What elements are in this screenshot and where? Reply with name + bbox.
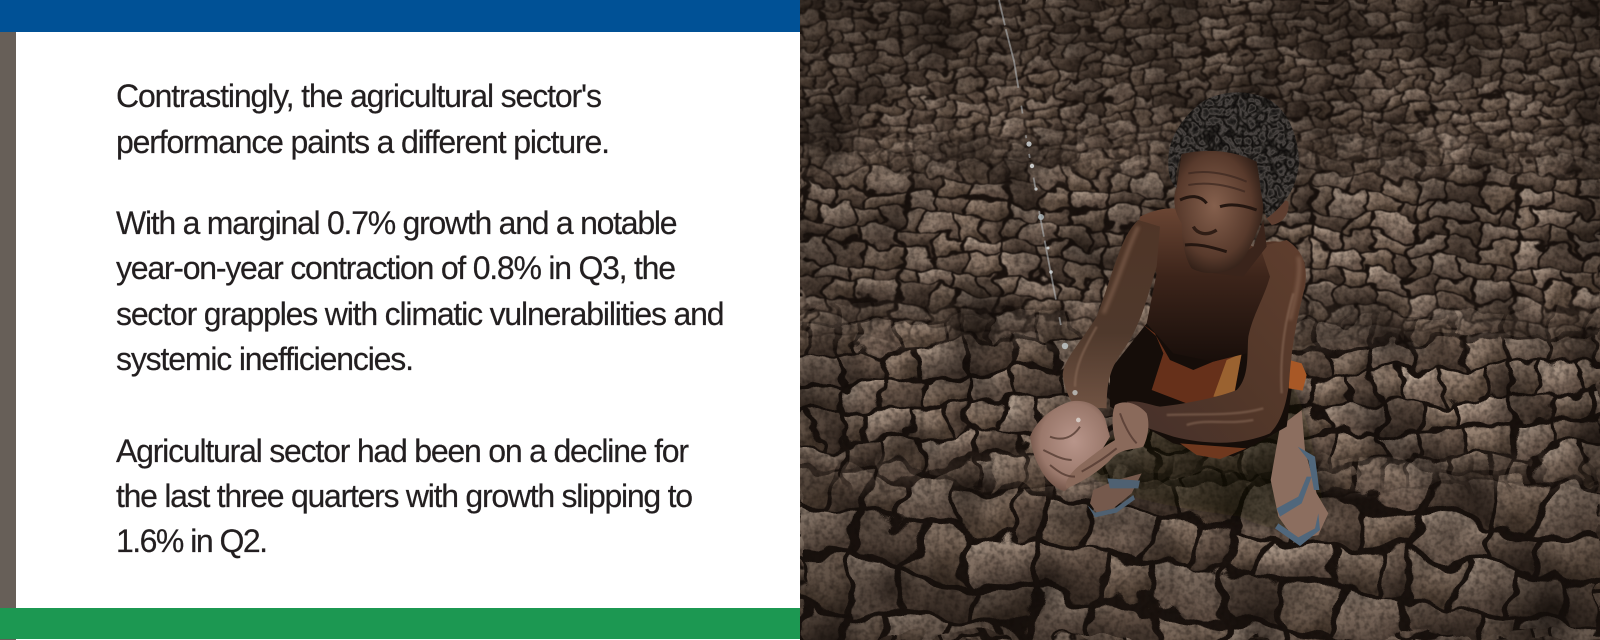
right arm xyxy=(1127,240,1306,443)
water in hand xyxy=(1072,390,1078,395)
paragraph 3 xyxy=(116,433,693,559)
neck xyxy=(1213,220,1267,277)
right sandal xyxy=(1275,447,1320,546)
paragraph 1: performance paints a different picture. xyxy=(116,124,610,160)
left sandal xyxy=(1087,478,1140,517)
cracked earth ground xyxy=(800,0,1600,640)
paragraph 1: Contrastingly, the agricultural sector's xyxy=(116,78,602,114)
panel: text panel xyxy=(0,0,800,640)
forearm veins xyxy=(1075,293,1293,425)
bottom green band xyxy=(0,608,800,639)
paragraph 2: sector grapples with climatic vulnerabilities and xyxy=(116,296,724,332)
hair xyxy=(1168,92,1299,218)
paragraph 3: Agricultural sector had been on a decline for xyxy=(116,433,689,469)
top blue band xyxy=(0,0,800,32)
paragraph 2: systemic inefficiencies. xyxy=(116,341,414,377)
left foot xyxy=(1090,473,1142,513)
paragraph 2: year-on-year contraction of 0.8% in Q3, the xyxy=(116,250,676,286)
paragraph 3: 1.6% in Q2. xyxy=(116,523,268,559)
torso xyxy=(1137,208,1305,362)
cupped left hand xyxy=(1030,401,1110,491)
paragraph 3: the last three quarters with growth slipping to xyxy=(116,478,693,514)
facial features xyxy=(1180,172,1257,252)
ear xyxy=(1265,200,1289,225)
hands xyxy=(1030,401,1148,491)
body text xyxy=(116,78,724,559)
paragraph 2 xyxy=(116,205,724,377)
water stream xyxy=(999,0,1068,349)
ground shadow xyxy=(1080,387,1323,530)
right leg and foot xyxy=(1271,410,1328,540)
overlapping right hand xyxy=(1066,402,1148,488)
farmer xyxy=(1030,92,1328,546)
photo: farmer cupping water on cracked earth xyxy=(800,0,1600,640)
left grey stripe xyxy=(0,32,16,640)
shoulder highlights xyxy=(1103,227,1299,320)
paragraph 2: With a marginal 0.7% growth and a notable xyxy=(116,205,678,241)
left arm xyxy=(1063,220,1160,408)
paragraph 1 xyxy=(116,78,610,160)
shadowed knee area xyxy=(1110,320,1293,457)
face xyxy=(1174,151,1263,273)
cloth xyxy=(1142,323,1307,459)
